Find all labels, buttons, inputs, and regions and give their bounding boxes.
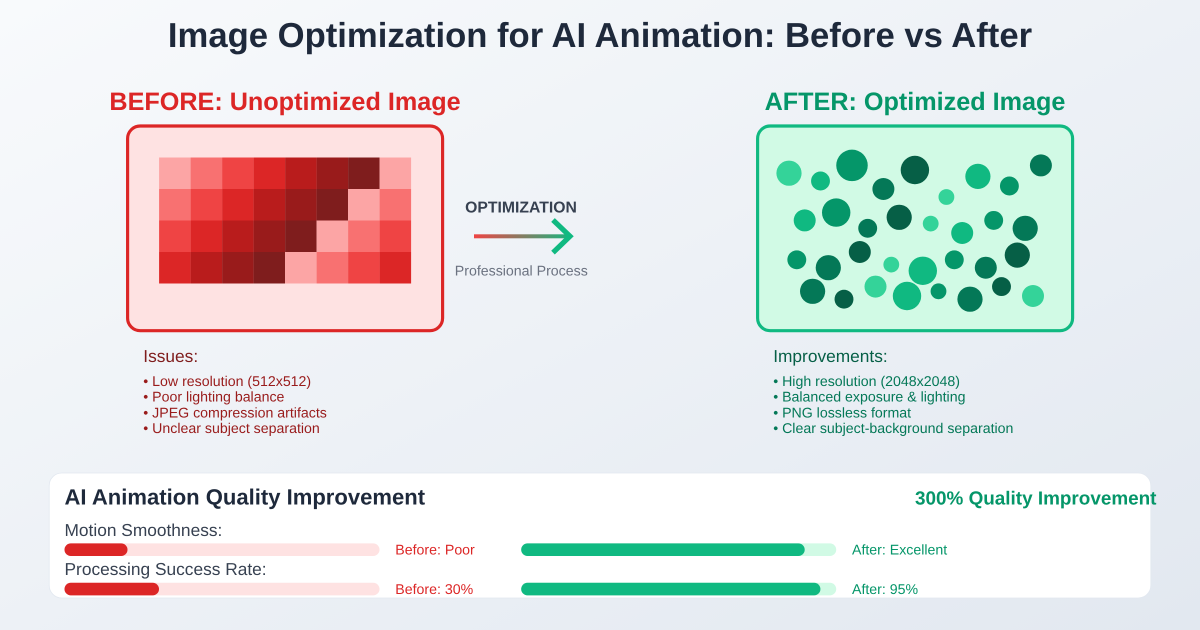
- improvements list: • High resolution (2048x2048): [773, 374, 960, 390]
- metric: motion smoothness: [64, 520, 947, 558]
- issues list: • Poor lighting balance: [143, 390, 285, 406]
- panel: quality improvement: [49, 473, 1157, 598]
- arrow: optimization: [455, 200, 588, 280]
- after bar: [521, 583, 836, 595]
- before bar: [64, 543, 380, 556]
- after bar: [521, 543, 836, 556]
- metric: processing success rate: [64, 559, 919, 598]
- panel: before: [109, 88, 461, 437]
- after value: After: 95%: [852, 582, 919, 598]
- heading: before: BEFORE: Unoptimized Image: [109, 88, 461, 116]
- panel heading: AI Animation Quality Improvement: [64, 484, 426, 510]
- title: Image Optimization for AI Animation: Before vs After: [168, 17, 1032, 55]
- arrow caption: Professional Process: [455, 264, 588, 280]
- before value: Before: Poor: [395, 542, 475, 558]
- arrow shaft: [474, 234, 570, 238]
- after value: After: Excellent: [852, 542, 947, 558]
- heading: after: AFTER: Optimized Image: [765, 88, 1065, 116]
- improvements heading: Improvements:: [773, 346, 888, 366]
- issues heading: Issues:: [143, 346, 198, 366]
- sharp image dots: [776, 150, 1052, 312]
- improvements list: • Balanced exposure & lighting: [773, 390, 965, 406]
- image frame: optimized: [758, 126, 1073, 331]
- issues list: • Unclear subject separation: [143, 421, 320, 437]
- panel: after: [758, 88, 1073, 437]
- improvement callout: 300% Quality Improvement: [915, 488, 1157, 510]
- arrow label: OPTIMIZATION: [465, 200, 577, 217]
- issues list: [143, 374, 327, 437]
- improvements list: • PNG lossless format: [773, 405, 911, 421]
- image frame: unoptimized: [128, 126, 443, 331]
- issues list: • JPEG compression artifacts: [143, 405, 327, 421]
- improvements list: • Clear subject-background separation: [773, 421, 1013, 437]
- before value: Before: 30%: [395, 582, 474, 598]
- arrow head: [553, 220, 570, 253]
- pixelated image grid: [159, 158, 411, 284]
- metric label: Processing Success Rate:: [64, 559, 267, 579]
- panel background: [49, 473, 1151, 598]
- before bar: [64, 583, 380, 595]
- improvements list: [773, 374, 1013, 437]
- issues list: • Low resolution (512x512): [143, 374, 311, 390]
- metric label: Motion Smoothness:: [64, 520, 222, 540]
